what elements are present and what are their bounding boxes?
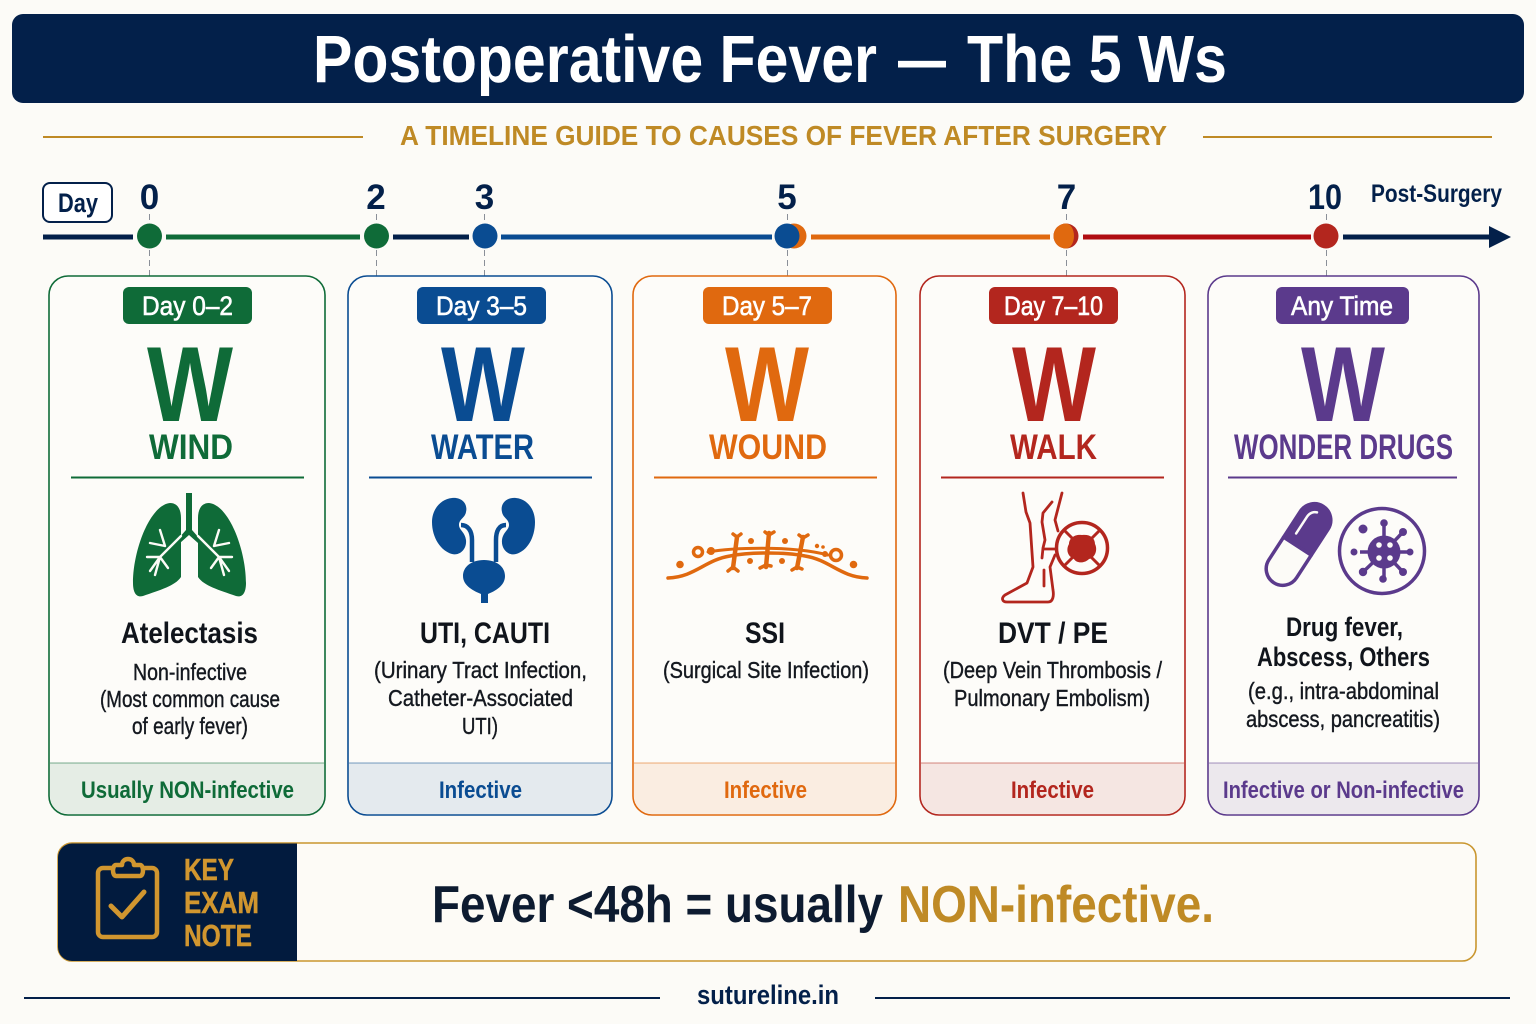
key message: NON-infective. — [898, 876, 1214, 934]
day 3 marker: 3 — [475, 178, 494, 217]
walk description: (Deep Vein Thrombosis / — [943, 657, 1163, 683]
day 10 marker — [1308, 178, 1342, 248]
day 2 marker: 2 — [366, 178, 386, 217]
title banner: The 5 Ws — [967, 22, 1227, 97]
wind description: (Most common cause — [100, 686, 280, 712]
water badge — [417, 287, 546, 324]
panel: wound — [633, 276, 896, 815]
title banner — [12, 14, 1524, 103]
water name: WATER — [431, 428, 534, 467]
icon: lungs — [133, 493, 246, 596]
icon: virus — [1340, 508, 1424, 594]
arrow head — [1489, 226, 1511, 248]
wound cause: SSI — [745, 617, 785, 650]
walk description: Pulmonary Embolism) — [954, 685, 1150, 711]
day 5 marker — [774, 178, 806, 248]
wound badge — [703, 287, 832, 324]
key exam note label: EXAM — [184, 885, 259, 920]
water badge: Day 3–5 — [436, 291, 527, 321]
water description: (Urinary Tract Infection, — [374, 657, 587, 683]
wind name: WIND — [149, 428, 233, 467]
title banner: — — [898, 22, 946, 97]
wind description: of early fever) — [132, 713, 248, 739]
icon: leg with blocked clot — [1003, 493, 1108, 602]
day 0 marker: 0 — [140, 178, 159, 217]
wind footer — [50, 763, 324, 814]
water description: Catheter-Associated — [388, 685, 573, 711]
wind description — [100, 659, 280, 739]
water description — [374, 657, 587, 739]
day 5 marker: 5 — [777, 178, 797, 217]
day 7 marker: 7 — [1057, 178, 1076, 217]
wonder drugs name: WONDER DRUGS — [1234, 428, 1453, 467]
subtitle: A TIMELINE GUIDE TO CAUSES OF FEVER AFTER SURGERY — [400, 120, 1167, 151]
wonder drugs footer — [1209, 763, 1478, 814]
wound letter: W — [725, 324, 809, 444]
walk footer — [921, 763, 1184, 814]
walk description — [943, 657, 1163, 711]
day label: Day — [58, 188, 98, 218]
wind footer: Usually NON-infective — [81, 777, 294, 804]
day 10 marker: 10 — [1308, 178, 1342, 217]
walk name: WALK — [1010, 428, 1097, 467]
icon: capsule — [1260, 497, 1337, 592]
day 7 marker — [1054, 178, 1078, 248]
icon: sutured wound — [668, 532, 867, 578]
walk letter: W — [1012, 324, 1096, 444]
water letter: W — [441, 324, 525, 444]
key exam note label: NOTE — [184, 918, 252, 953]
wonder drugs description: abscess, pancreatitis) — [1246, 706, 1440, 732]
day label — [43, 183, 112, 222]
water footer: Infective — [439, 777, 522, 804]
water description: UTI) — [462, 713, 498, 739]
icon: kidneys and bladder — [432, 498, 535, 603]
wonder drugs description — [1246, 678, 1440, 732]
wind badge — [123, 287, 252, 324]
day 2 marker — [364, 178, 389, 248]
wind cause: Atelectasis — [121, 617, 258, 650]
timeline — [43, 178, 1511, 276]
title banner: Postoperative Fever — [313, 22, 877, 97]
wound description: (Surgical Site Infection) — [663, 657, 869, 683]
water footer — [349, 763, 611, 814]
panel: wind — [49, 276, 325, 815]
wonder drugs letter: W — [1301, 324, 1385, 444]
icon: clipboard — [98, 859, 157, 937]
panel: water — [348, 276, 612, 815]
wound name: WOUND — [709, 428, 827, 467]
day 0 marker — [137, 178, 162, 248]
wound badge: Day 5–7 — [722, 291, 812, 321]
wind badge: Day 0–2 — [142, 291, 233, 321]
day 3 marker — [472, 178, 498, 248]
wound footer: Infective — [724, 777, 807, 804]
walk footer: Infective — [1011, 777, 1094, 804]
wonder drugs badge: Any Time — [1291, 291, 1393, 321]
wonder drugs causes: Drug fever, — [1286, 612, 1403, 642]
key message — [432, 876, 1214, 934]
key exam note callout — [58, 843, 1476, 961]
wonder drugs footer: Infective or Non-infective — [1223, 777, 1464, 804]
panel: walk — [920, 276, 1185, 815]
walk badge: Day 7–10 — [1004, 291, 1103, 321]
footer: sutureline.in — [697, 980, 839, 1010]
key message: Fever <48h = usually — [432, 876, 883, 934]
key exam note label: KEY — [184, 852, 234, 887]
wonder drugs badge — [1276, 287, 1409, 324]
wound footer — [634, 763, 895, 814]
wind letter: W — [147, 324, 233, 444]
wonder drugs description: (e.g., intra-abdominal — [1248, 678, 1439, 704]
wonder drugs causes — [1257, 612, 1430, 672]
wonder drugs causes: Abscess, Others — [1257, 642, 1430, 672]
walk cause: DVT / PE — [998, 617, 1108, 650]
wind description: Non-infective — [133, 659, 247, 685]
water cause: UTI, CAUTI — [420, 617, 550, 650]
panel: wonder drugs — [1208, 276, 1479, 815]
post-surgery label: Post-Surgery — [1371, 180, 1502, 208]
key exam note label — [184, 852, 259, 953]
